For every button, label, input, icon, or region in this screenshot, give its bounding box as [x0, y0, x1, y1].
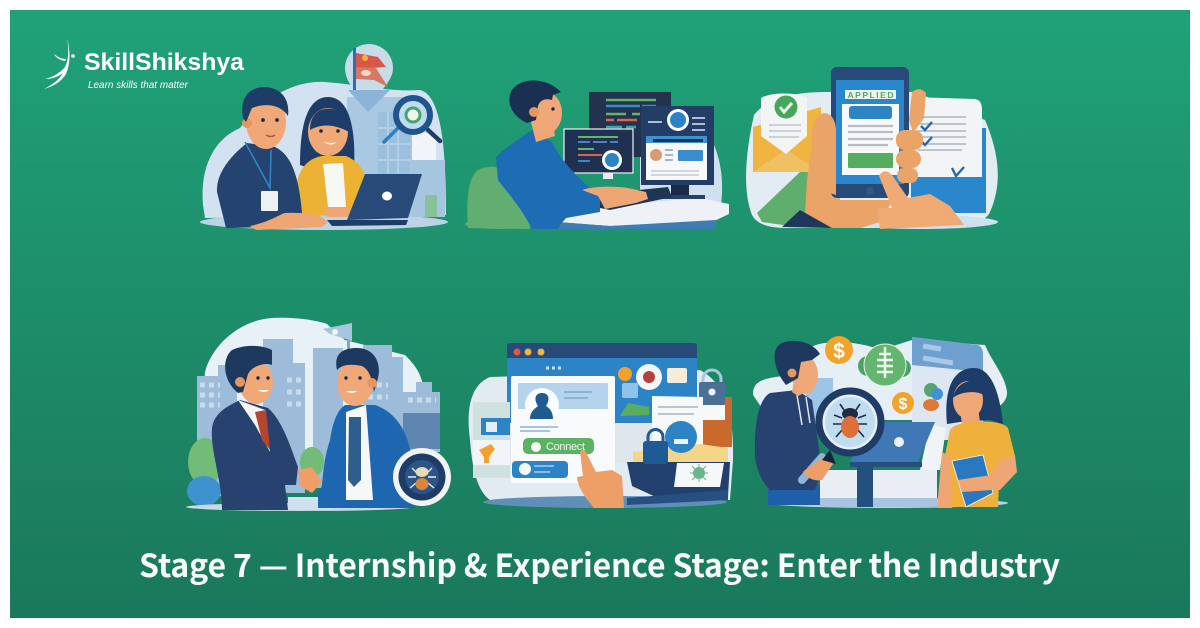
green tree icon	[858, 344, 911, 386]
back monitor with code	[589, 92, 671, 157]
logo: SkillShikshya	[44, 38, 244, 91]
floating app icons	[618, 364, 687, 416]
tagline: Learn skills that matter	[88, 80, 189, 91]
title: Stage 7 — Internship & Experience Stage: Enter the Industry	[139, 541, 1060, 587]
ground ellipse	[200, 214, 448, 230]
icon: leaping figure swoosh	[44, 38, 75, 89]
blue book	[952, 455, 993, 507]
panel 4: handshake in the city	[186, 318, 451, 511]
ground ellipse	[842, 215, 998, 229]
brand name: SkillShikshya	[84, 49, 244, 76]
laptop	[850, 422, 935, 467]
desk	[557, 198, 729, 229]
magnifier with bug	[802, 391, 881, 480]
browser window	[507, 343, 697, 463]
trees and bush	[187, 438, 324, 506]
woman in yellow jacket	[295, 97, 367, 217]
left monitor with code	[564, 129, 633, 179]
dollar coin small	[892, 392, 914, 414]
panel 3: application on phone	[746, 67, 998, 229]
right monitor with dashboard	[641, 106, 714, 199]
pointing hand	[877, 171, 964, 229]
panel 1: interns at a laptop	[200, 44, 448, 230]
blue folder	[911, 128, 986, 213]
navy padlock	[643, 430, 668, 464]
location pin with flag	[345, 44, 393, 112]
backdrop blob	[753, 340, 1007, 420]
laptop with virus screen	[627, 462, 730, 505]
camera beacon on skyline	[323, 323, 352, 352]
ground ellipse	[768, 498, 1008, 508]
dollar coin large: $	[833, 340, 845, 363]
left man in navy suit	[212, 346, 298, 510]
APPLIED label: APPLIED	[848, 90, 894, 100]
office building	[347, 97, 445, 217]
navy sleeve	[782, 210, 832, 228]
profile document	[652, 396, 725, 455]
backdrop blob	[203, 82, 446, 218]
document with logos	[912, 337, 983, 440]
fingers gripping phone	[811, 89, 926, 195]
panel behind man	[806, 378, 833, 424]
dollar coin large	[825, 336, 853, 364]
panel 2: developer at monitors	[465, 80, 729, 229]
base block	[288, 497, 332, 510]
right man in blue suit	[318, 348, 414, 508]
paper sheet by laptop	[920, 424, 946, 470]
left side cards	[473, 402, 510, 478]
chat button	[512, 461, 568, 478]
panel 5: networking browser window	[469, 343, 733, 508]
developer figure	[496, 80, 648, 229]
laptop	[327, 174, 422, 226]
backdrop blob	[469, 370, 733, 500]
connect button: Connect	[546, 441, 585, 453]
backdrop blob	[200, 318, 424, 450]
man with lanyard	[217, 87, 328, 230]
blue avatar	[665, 421, 697, 453]
monitor stand	[857, 466, 873, 507]
backdrop blob	[746, 92, 998, 228]
city skyline	[197, 339, 440, 496]
clasped hands	[298, 467, 322, 493]
table	[820, 470, 937, 507]
approved check card	[761, 94, 807, 154]
chair	[467, 167, 530, 229]
green note	[757, 172, 815, 226]
woman in yellow top	[937, 368, 1017, 508]
keyboard	[590, 187, 672, 210]
pointing hand	[577, 450, 624, 508]
phone	[805, 67, 909, 228]
panel 6: bug bounty pair	[753, 336, 1017, 508]
checklist document	[911, 97, 982, 177]
ground strip	[483, 496, 727, 508]
grey padlock	[699, 370, 725, 405]
man in hoodie	[755, 341, 822, 505]
ground ellipse	[186, 503, 414, 511]
bug badge	[393, 448, 451, 506]
dollar coin small: $	[899, 396, 908, 413]
magnifier icon	[384, 98, 440, 142]
backdrop blob	[640, 120, 722, 205]
envelope	[753, 107, 821, 172]
profile card	[511, 376, 615, 483]
ground shadow	[465, 219, 535, 229]
orange document edge	[703, 397, 732, 447]
yellow folder	[633, 444, 728, 490]
